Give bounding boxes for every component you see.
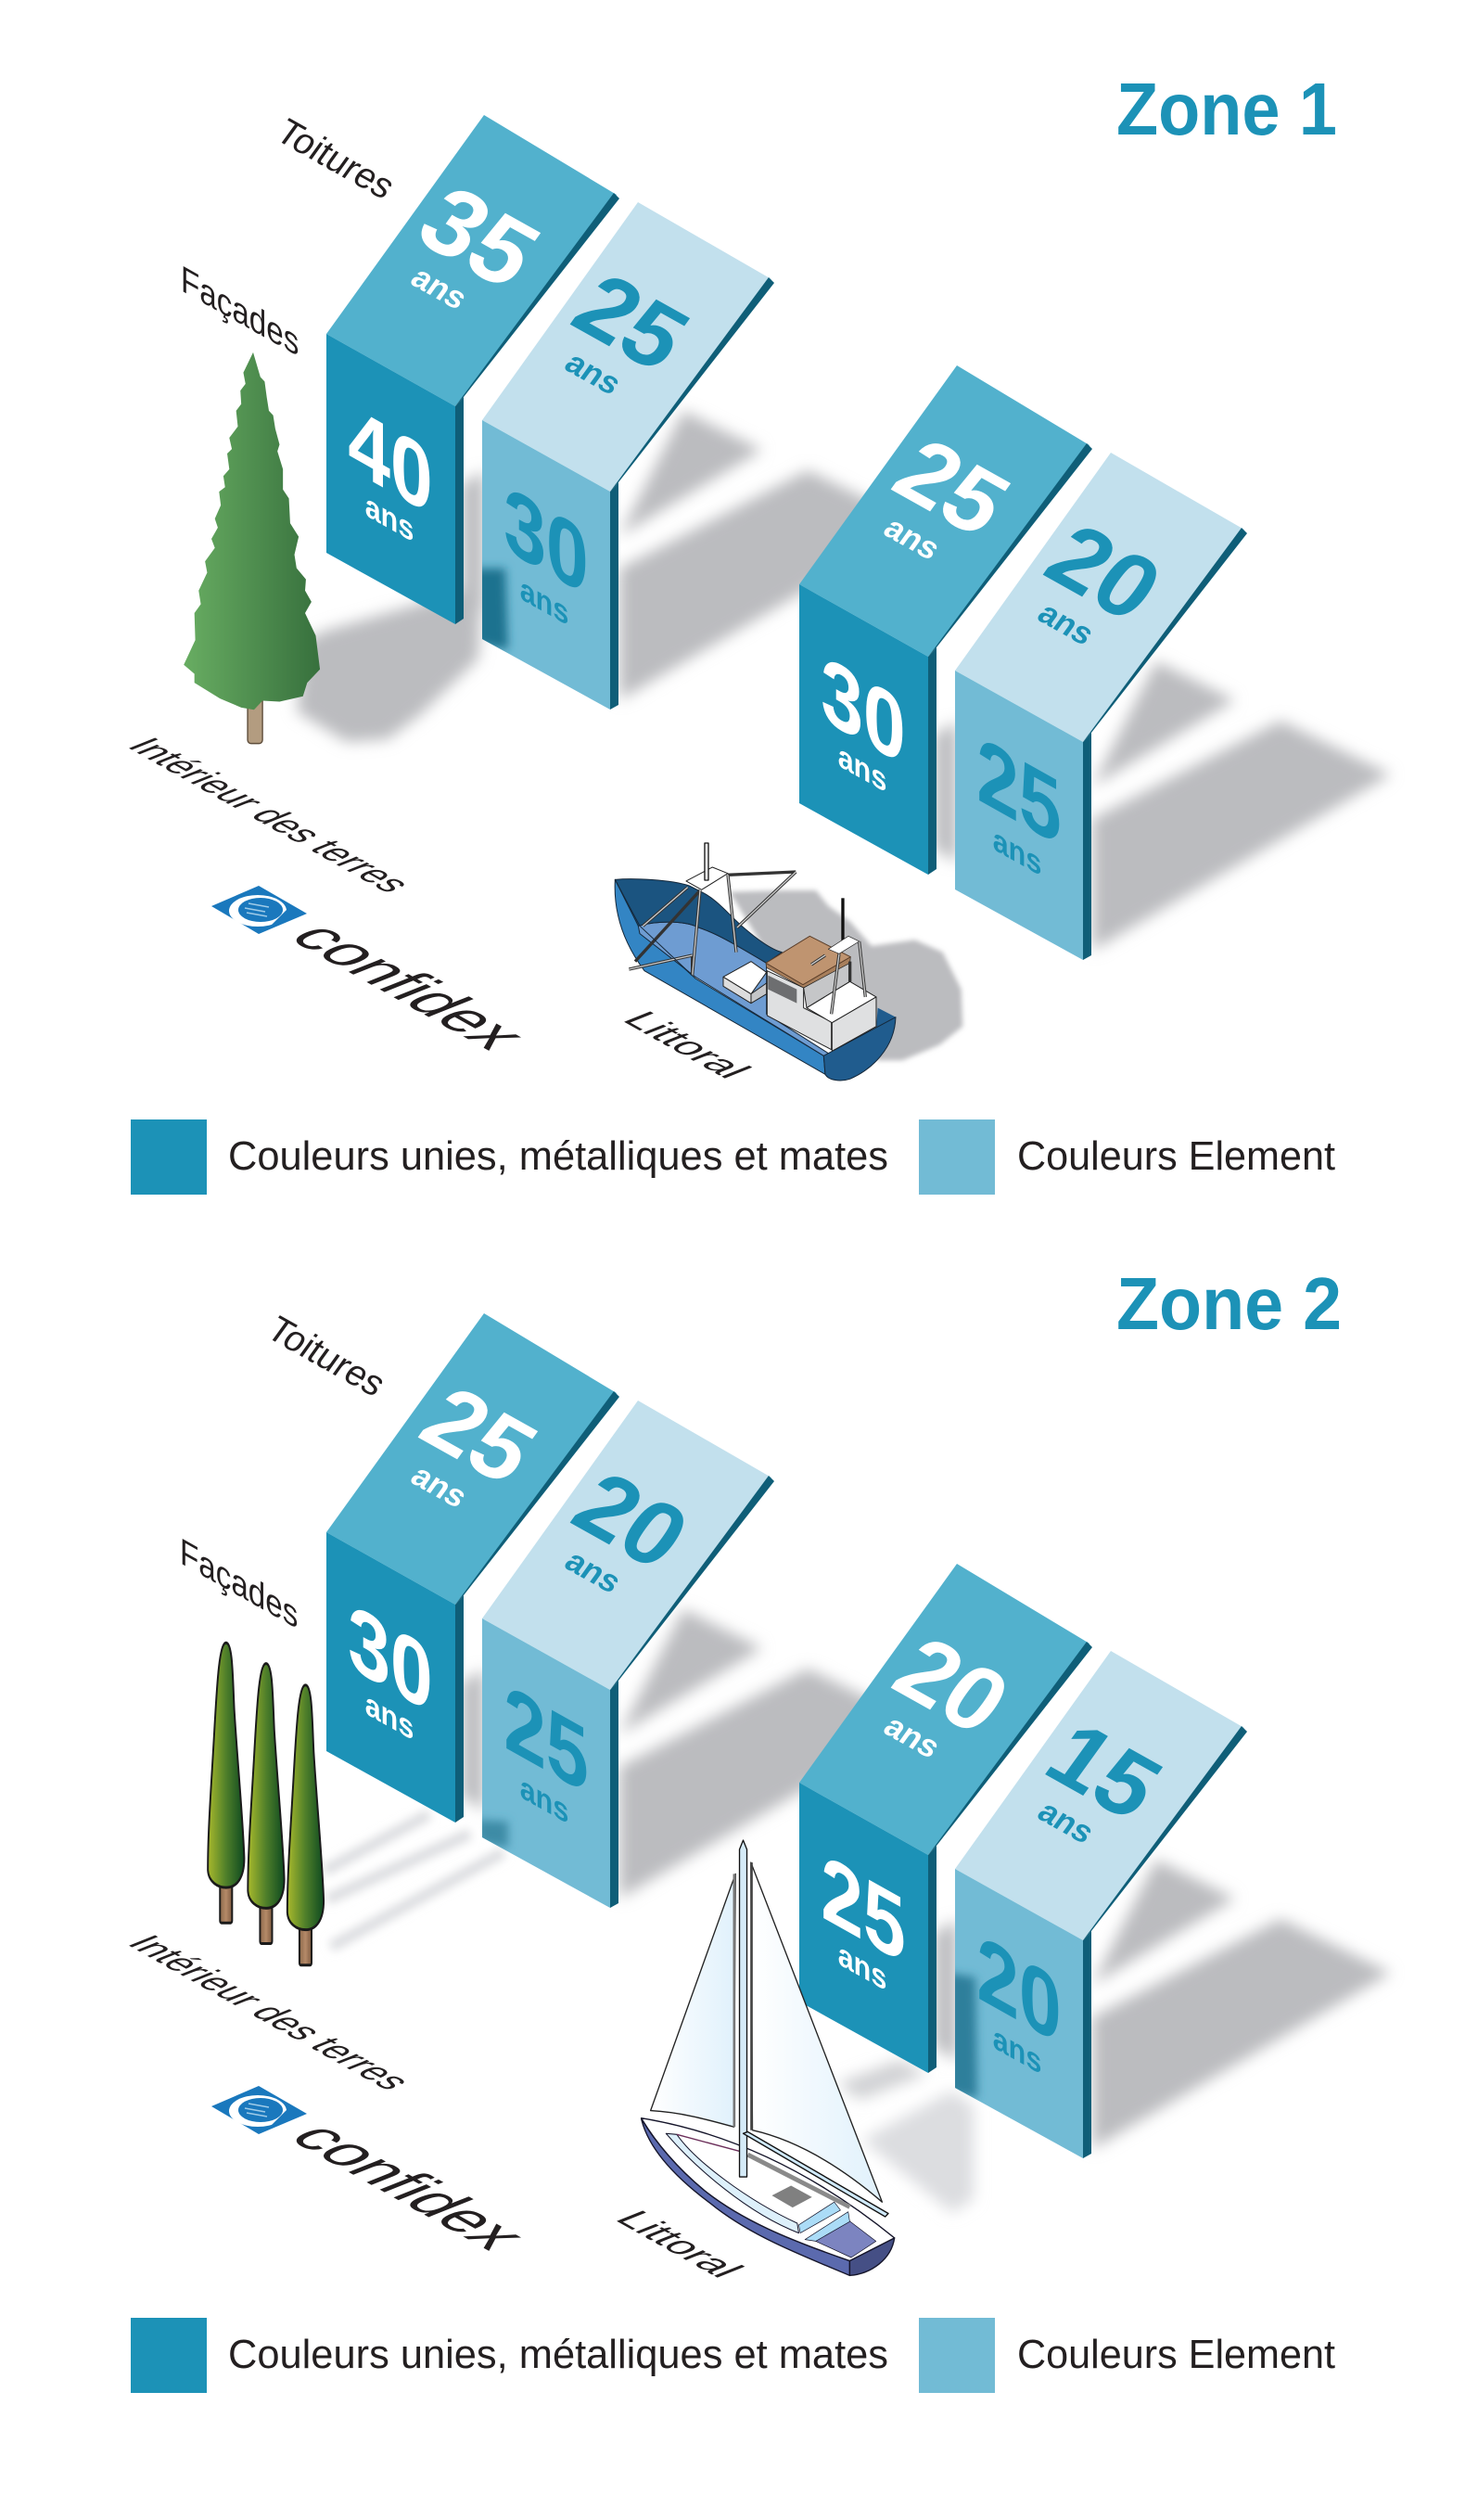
block: roof and facade Element: 25 [555,255,707,390]
block: roof and facade solid [799,1564,1092,2073]
label: Façades zone 2: Façades [180,1530,298,1637]
block: roof and facade Element: ans [1031,1794,1101,1850]
block: roof and facade Element [948,1651,1247,2158]
label: Intérieur des terres zone 1: Intérieur des terres [118,734,422,897]
block: roof and facade Element: 20 [1028,505,1179,641]
block: roof and facade Element [475,202,774,710]
swatch: Element colours [919,1119,995,1195]
block: roof and facade Element [955,453,1247,960]
block: roof and facade Element: ans [993,820,1041,884]
label: Littoral zone 1: Littoral [613,1007,760,1083]
chart: zone 1 inland blocks [326,115,774,710]
icon: fishing boat with shadow [615,843,962,1081]
legend label: Element colours: Couleurs Element [1017,2332,1335,2377]
icon: cypress 1 [208,1643,244,1923]
block: roof and facade solid: 20 [876,1618,1027,1754]
icon: cypress trees [208,1643,324,1965]
panel: zone 2 ground shadows [462,1609,1391,2149]
label: Façades zone 1: Façades [181,258,299,365]
swatch: Element colours [919,2318,995,2393]
block: roof and facade solid: 40 [348,384,433,535]
block: roof and facade Element: ans [558,1543,628,1600]
icon: fir tree [184,352,320,744]
block: roof and facade solid: 30 [821,634,906,786]
block: roof and facade solid: 25 [403,1368,554,1503]
block: roof and facade Element: 25 [503,1663,589,1814]
chart: zone 2 coastal blocks [799,1564,1247,2158]
block: roof and facade solid: ans [404,260,474,316]
block: roof and facade Element: 20 [555,1453,707,1589]
block: roof and facade Element: ans [520,569,568,633]
logo: confidex zone 1: confidex [274,915,545,1056]
block: roof and facade solid [326,1313,619,1823]
label: Intérieur des terres zone 2: Intérieur des terres [118,1931,422,2094]
block: roof and facade Element: ans [993,2018,1041,2082]
logo: confidex zone 2 [211,2086,545,2257]
block: roof and facade Element: 30 [503,465,589,616]
block: roof and facade Element: 15 [1028,1704,1179,1839]
block: roof and facade solid: ans [877,1708,947,1765]
block: roof and facade Element: ans [520,1768,568,1832]
block: roof and facade Element: ans [1031,595,1101,652]
block: roof and facade solid: ans [838,1935,886,1999]
block: roof and facade solid [799,365,1092,875]
block: roof and facade solid: ans [404,1458,474,1515]
label: Toitures zone 1: Toitures [269,112,402,207]
label: Toitures zone 2: Toitures [260,1310,393,1404]
block: roof and facade solid: 25 [876,420,1027,556]
legend label: solid colours: Couleurs unies, métalliques et mates [228,2332,888,2377]
shadow: sailboat [837,2060,974,2213]
block: roof and facade Element: 20 [976,1913,1062,2065]
block: roof and facade Element [478,1401,774,1908]
legend: zone 1 [131,1119,1335,1195]
block: roof and facade solid: ans [838,736,886,800]
block: roof and facade solid: ans [365,486,414,550]
label: Littoral zone 2: Littoral [605,2207,753,2283]
icon: sailboat [642,1840,895,2275]
legend: zone 2 [131,2318,1335,2393]
block: roof and facade solid [326,115,619,624]
legend label: solid colours: Couleurs unies, métalliques et mates [228,1133,888,1179]
panel: zone 1 ground shadows [297,411,1391,951]
icon: confidex emblem [211,2086,307,2134]
block: roof and facade solid: 25 [821,1833,906,1984]
swatch: solid colours [131,1119,207,1195]
block: roof and facade solid: ans [877,510,947,567]
chart: zone 2 inland blocks [326,1313,774,1908]
block: roof and facade Element: ans [558,345,628,402]
logo: confidex zone 1 [211,886,545,1056]
title: Zone 1: Zone 1 [1116,68,1337,150]
icon: cypress 3 [287,1685,324,1965]
swatch: solid colours [131,2318,207,2393]
block: roof and facade solid: ans [365,1684,414,1748]
block: roof and facade solid: 30 [348,1582,433,1733]
title: Zone 2: Zone 2 [1116,1262,1342,1345]
icon: confidex emblem [211,886,307,934]
logo: confidex zone 2: confidex [274,2116,545,2257]
chart: zone 1 coastal blocks [799,365,1247,960]
block: roof and facade Element: 25 [976,715,1062,866]
shadow: cypress streaks [325,1814,503,1947]
legend label: Element colours: Couleurs Element [1017,1133,1335,1179]
icon: cypress 2 [248,1664,285,1944]
block: roof and facade solid: 35 [400,166,558,308]
